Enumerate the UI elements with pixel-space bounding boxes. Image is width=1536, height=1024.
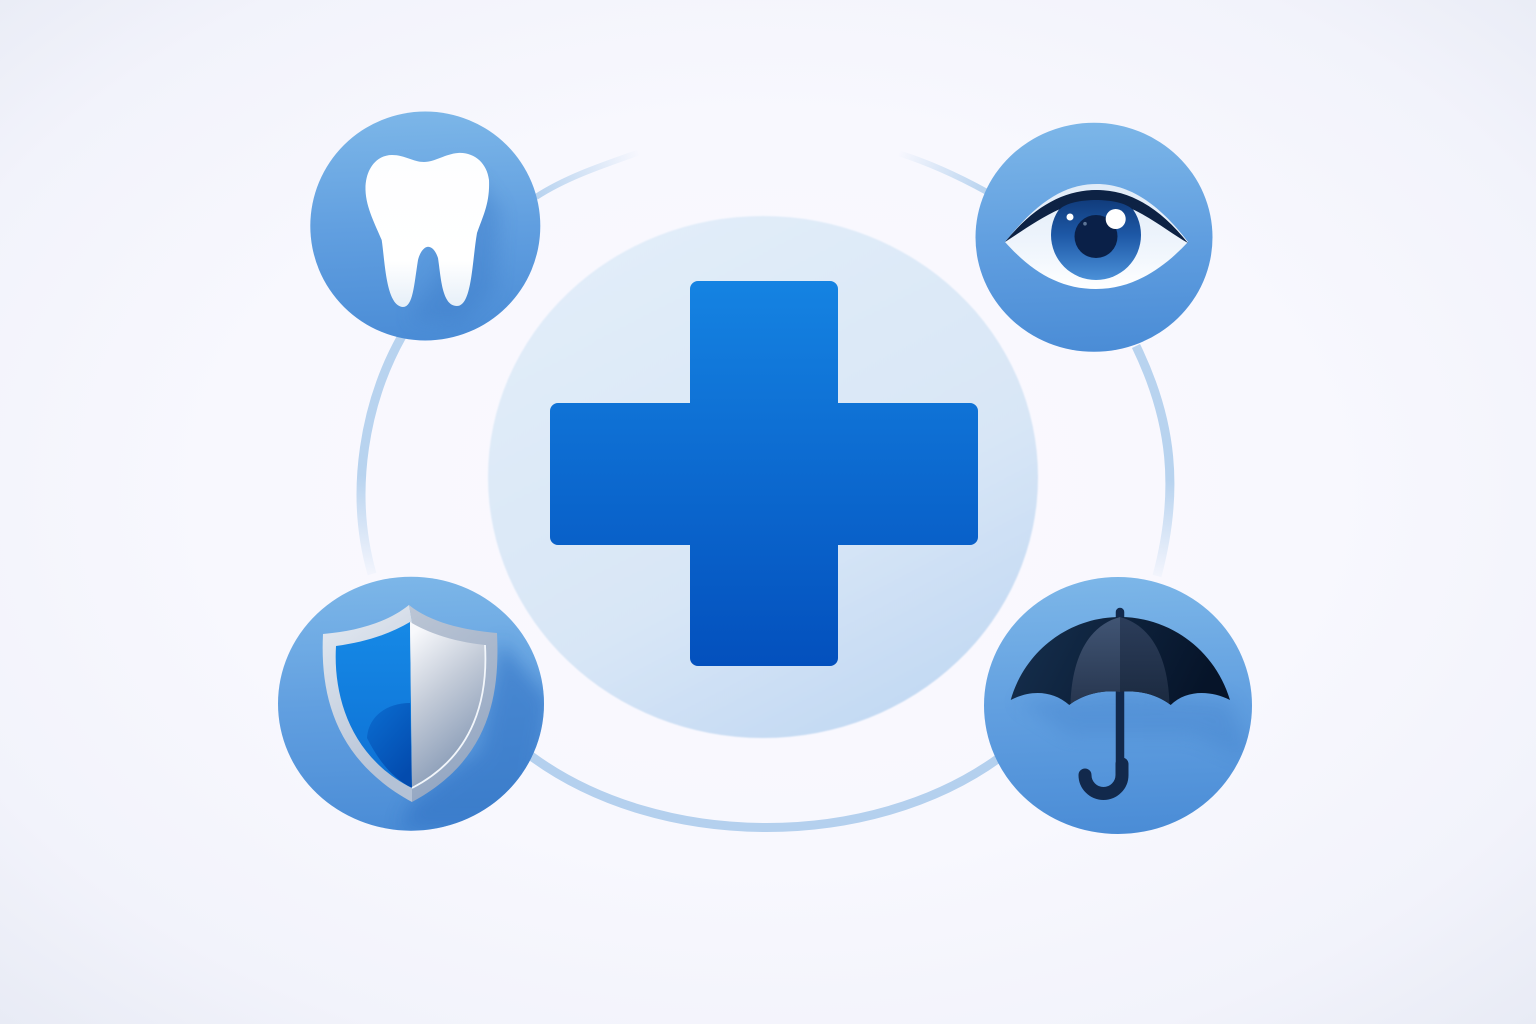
badge: shield [278, 577, 550, 831]
icon: eye [1005, 184, 1188, 289]
medical cross [550, 281, 978, 666]
icon: umbrella [1011, 612, 1230, 794]
badge: tooth [310, 112, 540, 340]
icon: tooth [365, 153, 489, 307]
badge: umbrella [984, 577, 1252, 834]
connecting ring [361, 152, 1170, 828]
badge: eye [976, 123, 1212, 352]
icon: shield [323, 605, 497, 802]
central disc [488, 216, 1038, 738]
